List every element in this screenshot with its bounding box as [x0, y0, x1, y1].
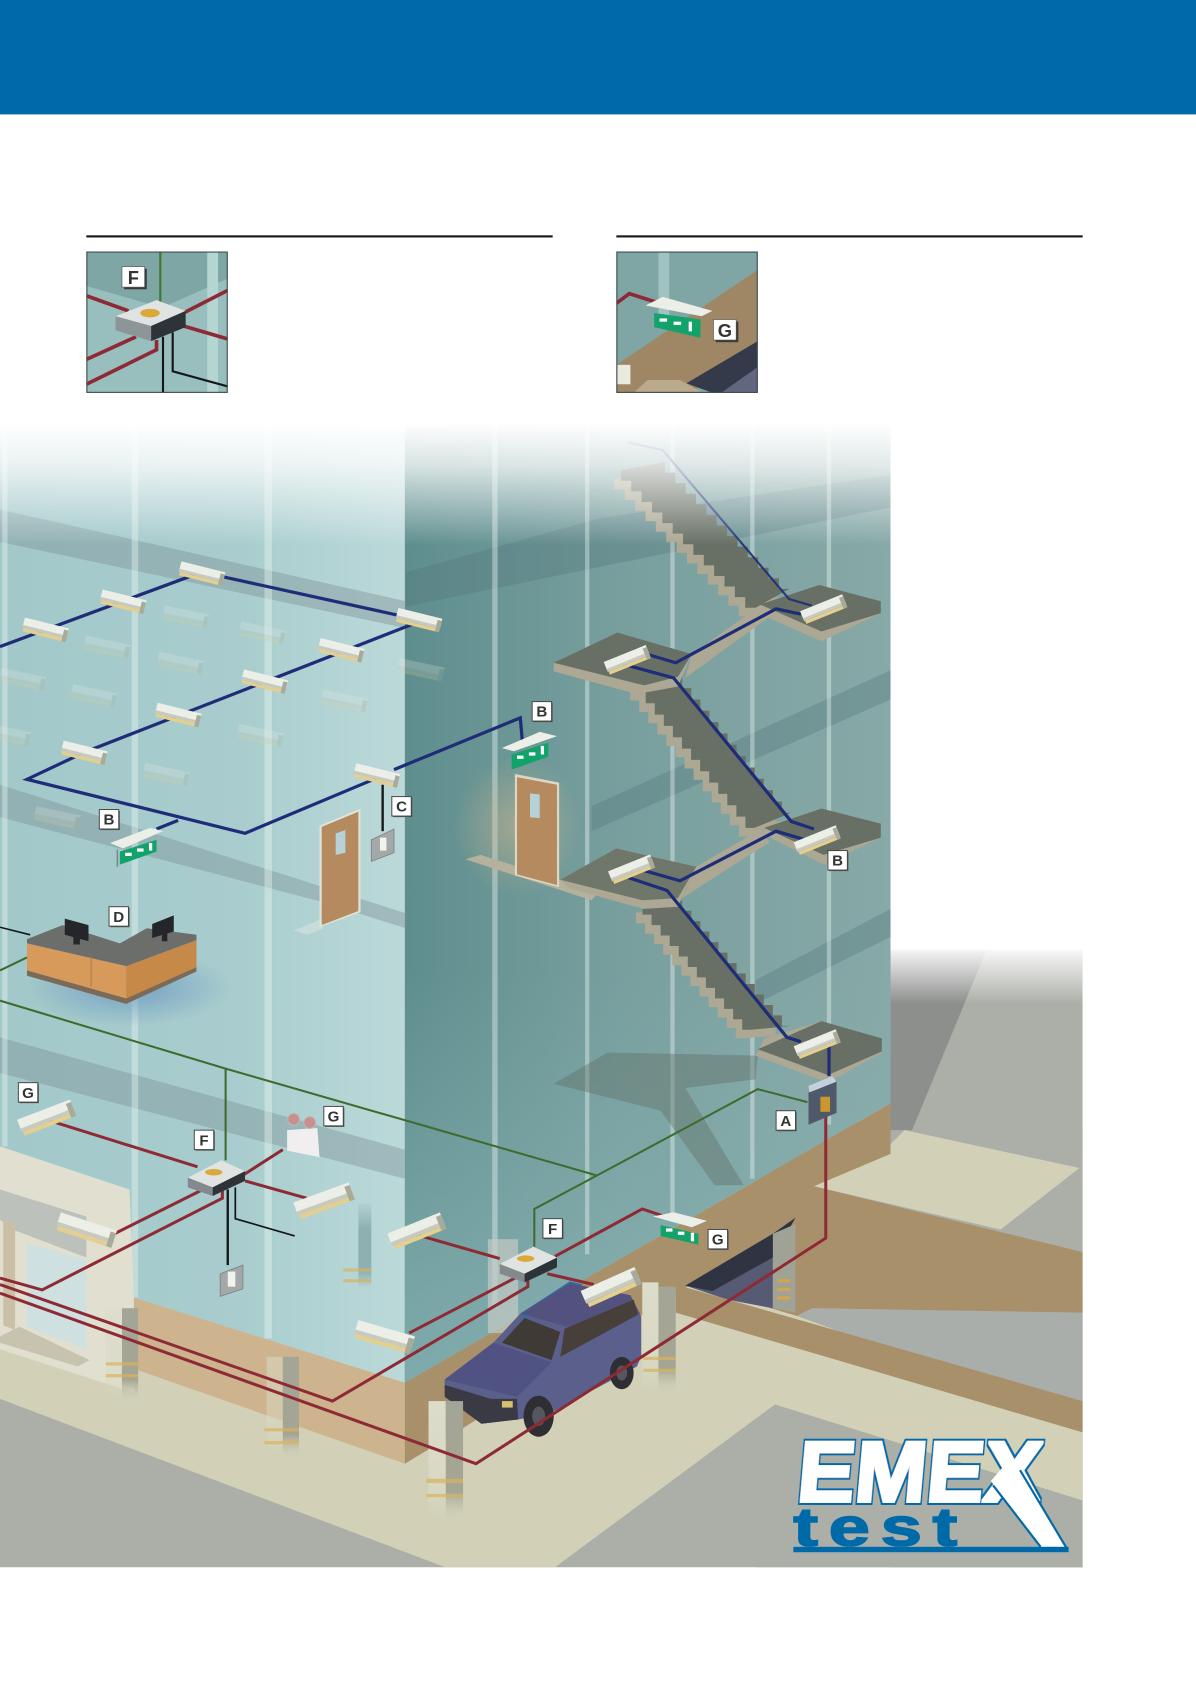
door: lobby	[294, 808, 361, 935]
ceiling lights upper floor	[22, 561, 442, 788]
label: G left	[18, 1083, 39, 1103]
stair landing floor slab and door glow	[462, 766, 596, 900]
building right face	[405, 423, 891, 1383]
tan plinth left face	[134, 1297, 405, 1464]
wiring: green network line	[0, 957, 807, 1247]
top fade overlay	[0, 421, 892, 545]
stair landing middle right	[762, 808, 881, 865]
stairs	[554, 462, 882, 1083]
wiring: red power circuits	[0, 1112, 826, 1464]
test switch C	[371, 829, 394, 861]
car	[445, 1281, 641, 1437]
label: G twin-spot: G	[328, 1109, 339, 1126]
garage door	[685, 1218, 796, 1313]
label: G left: G	[22, 1085, 34, 1102]
stair lights	[604, 594, 847, 1059]
label: F right: F	[548, 1221, 557, 1238]
label: A	[776, 1111, 797, 1131]
control unit F lower right	[500, 1247, 557, 1282]
label: B lobby: B	[104, 812, 115, 829]
label: A: A	[780, 1113, 791, 1130]
doors	[294, 774, 559, 935]
label: C: C	[396, 799, 407, 816]
distribution board A	[808, 1076, 837, 1125]
label: F: F	[128, 267, 139, 288]
control unit F lower left	[188, 1160, 245, 1196]
label: G: G	[718, 320, 732, 341]
wiring: blue emergency circuit upper floor	[0, 573, 522, 833]
label: G twin-spot	[324, 1106, 344, 1127]
ramp retaining wall	[793, 1186, 1083, 1316]
pale pillar behind control unit	[488, 1239, 518, 1333]
panel: building cutaway scene	[0, 421, 1083, 1567]
stair landing upper left	[554, 633, 692, 694]
emergency twin-spot unit	[287, 1113, 320, 1157]
beige ramp top	[814, 1130, 1079, 1229]
panel: F inset	[86, 252, 228, 393]
stair flight 3	[636, 900, 791, 1038]
stair landing middle left	[560, 848, 696, 909]
entrance canopy	[0, 1146, 134, 1392]
label: F left	[194, 1130, 215, 1151]
switch lower floor	[220, 1265, 243, 1296]
reception desk	[27, 915, 216, 1022]
wiring: black signal lines	[0, 785, 383, 1265]
label: C	[392, 797, 412, 817]
building left face	[0, 423, 405, 1383]
stair flight 1	[614, 462, 793, 616]
logo: EMEX test	[793, 1425, 1069, 1557]
door: stair	[515, 774, 559, 887]
section rule left	[86, 235, 553, 237]
stair landing lower right	[756, 1021, 882, 1083]
tan plinth right face	[405, 1103, 891, 1464]
label: B upper right	[532, 702, 553, 722]
label: F left: F	[199, 1132, 209, 1149]
stair flight 2	[630, 677, 791, 837]
lower level lights	[17, 1099, 642, 1354]
logo: EMEX test: test	[793, 1497, 968, 1557]
ghost lower stairs	[554, 1052, 758, 1185]
section rule right	[616, 235, 1083, 237]
label: G garage	[708, 1229, 729, 1250]
label: F	[122, 267, 147, 289]
road behind low wall	[797, 1308, 1083, 1401]
header banner	[0, 0, 1196, 114]
floor bands right face	[406, 475, 891, 1004]
label: G garage: G	[712, 1232, 724, 1249]
stair mid run lower	[682, 829, 770, 898]
exit sign garage	[653, 1212, 707, 1245]
pavement	[0, 1241, 1083, 1567]
label: B stairs	[828, 851, 848, 871]
floor bands left face	[0, 509, 406, 1179]
label: D	[109, 907, 130, 927]
exit sign lobby	[110, 828, 163, 867]
label: B lobby	[99, 810, 120, 830]
label: B stairs: B	[832, 853, 843, 870]
stair landing upper right	[756, 585, 881, 641]
panel: G inset	[616, 252, 758, 393]
exit sign upper right	[502, 732, 557, 770]
label: B upper right: B	[536, 704, 547, 721]
label: G	[713, 320, 738, 342]
wiring: blue stair circuit	[622, 443, 829, 1076]
label: D: D	[113, 909, 124, 926]
faded background ceiling lights	[0, 605, 444, 829]
label: F right	[543, 1219, 563, 1239]
columns	[2, 423, 831, 1338]
low wall in front of garage	[676, 1285, 1083, 1432]
columns in front of building	[106, 1204, 676, 1522]
logo: EMEX test: EMEX	[794, 1425, 1046, 1520]
stair mid run upper	[686, 614, 768, 678]
